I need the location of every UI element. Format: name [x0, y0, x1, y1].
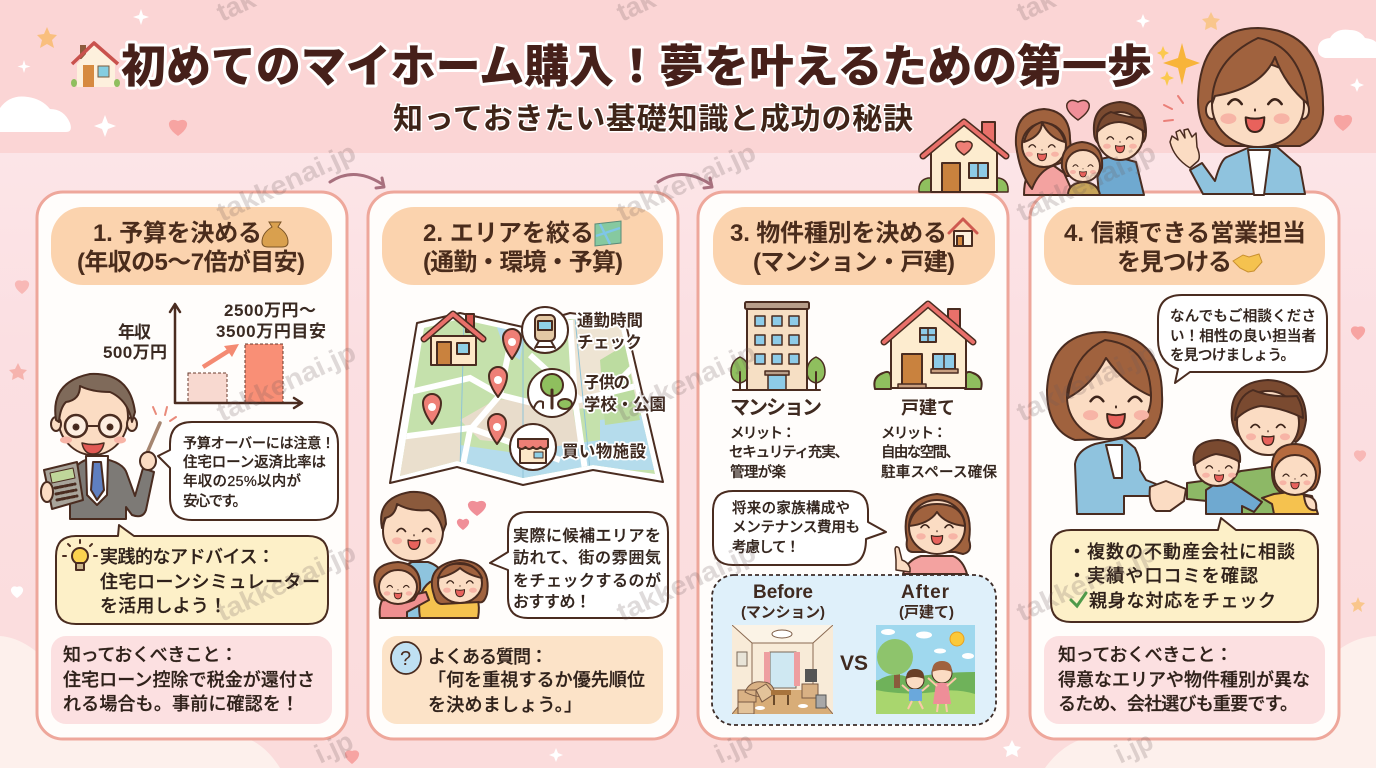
- watermarks: takkenai.jp: [212, 137, 360, 227]
- icon: detached house: [874, 304, 982, 389]
- info box: るため、会社選びも重要です。: [1058, 694, 1298, 714]
- info box: れる場合も。事前に確認を！: [63, 694, 299, 714]
- icon: light bulb: [63, 540, 97, 570]
- watermarks: takkenai.jp: [1012, 337, 1160, 427]
- FAQ box: 「何を重視するか優先順位: [428, 670, 645, 690]
- illustration: header heart house: [919, 122, 1008, 192]
- heading pill: 2. エリアを絞る: [423, 220, 594, 247]
- speech bubble: advisor: 住宅ローン返済比率は: [183, 454, 326, 471]
- character: pointing woman: [895, 494, 970, 574]
- watermarks: takkenai.jp: [1012, 537, 1160, 627]
- watermarks: takkenai.jp: [612, 537, 760, 627]
- panel: step 1 budget: [37, 192, 347, 739]
- watermarks: takkenai.jp: [1012, 137, 1160, 227]
- icon: question mark: ?: [400, 648, 411, 670]
- map labels: [562, 311, 666, 461]
- speech bubble: advisor: 予算オーバーには注意！: [183, 435, 335, 451]
- FAQ box: を決めましょう。」: [428, 695, 582, 715]
- icon: tree and park: [528, 369, 576, 417]
- heading pill: 4. 信頼できる営業担当: [1064, 220, 1306, 247]
- speech bubble: advisor: 年収の25%以内が: [183, 472, 302, 490]
- speech bubble: visit areas: 訪れて、街の雰囲気: [513, 549, 661, 567]
- watermarks: [212, 0, 1160, 768]
- panel: step 2 area: [368, 192, 678, 739]
- character: agent woman: [1047, 332, 1186, 514]
- info box: 知っておくべきこと：: [63, 645, 238, 665]
- checklist box: [1051, 518, 1318, 622]
- illustration: children in garden: [876, 625, 975, 714]
- comparison labels: 自由な空間、: [881, 444, 960, 461]
- icon: small house in title: [71, 43, 120, 87]
- comparison labels: メリット：: [881, 426, 947, 442]
- comparison labels: [729, 397, 998, 481]
- before after comparison: [712, 575, 996, 725]
- watermarks: takkenai.jp: [212, 337, 360, 427]
- map labels: 学校・公園: [584, 394, 666, 414]
- character: waving agent woman: [1164, 28, 1323, 195]
- comparison labels: 戸建て: [901, 398, 955, 418]
- speech bubble: visit areas: をチェックするのが: [513, 571, 661, 590]
- watermarks: takkenai.jp: [212, 537, 360, 627]
- speech bubble: future plans: メンテナンス費用も: [732, 519, 860, 536]
- speech bubble: future plans: [713, 491, 886, 565]
- illustration: header family: [1016, 102, 1146, 195]
- text: VS: VS: [840, 652, 868, 675]
- speech bubble: future plans: 将来の家族構成や: [732, 499, 850, 517]
- heading pill: 3. 物件種別を決める: [730, 220, 947, 247]
- comparison labels: 管理が楽: [730, 463, 786, 481]
- speech bubble: visit areas: 実際に候補エリアを: [513, 527, 661, 545]
- tip box: [56, 525, 328, 624]
- speech bubble: advisor: [158, 422, 338, 520]
- speech bubble: advisor: 安心です。: [183, 493, 247, 510]
- tip box: 実践的なアドバイス：: [100, 547, 275, 567]
- icon: shop: [510, 424, 556, 470]
- checklist box: ・複数の不動産会社に相談: [1068, 542, 1295, 562]
- icon: family heart: [1067, 100, 1089, 120]
- bar chart: 年収: [118, 322, 151, 342]
- checklist box: ・実績や口コミを確認: [1068, 566, 1258, 586]
- character: family: [374, 492, 488, 618]
- info box: 知っておくべきこと：: [1058, 645, 1233, 665]
- heading pill: [1044, 207, 1325, 285]
- panel: step 4 sales agent: [1030, 192, 1339, 739]
- heading pill: [713, 207, 995, 285]
- checklist box: 親身な対応をチェック: [1089, 591, 1276, 611]
- comparison labels: セキュリティ充実、: [729, 444, 849, 461]
- icon: house: [424, 314, 483, 365]
- comparison labels: マンション: [730, 397, 822, 419]
- bar chart: 500万円: [103, 343, 167, 362]
- map labels: 買い物施設: [562, 442, 646, 461]
- FAQ box: [382, 636, 663, 724]
- heading pill: (年収の5〜7倍が目安): [77, 248, 305, 276]
- heading pill: (マンション・戸建): [753, 249, 955, 276]
- map labels: 通勤時間: [577, 311, 643, 330]
- panel: step 3 property type: [698, 192, 1008, 739]
- comparison labels: 駐車スペース確保: [881, 464, 998, 481]
- before after comparison: (戸建て): [899, 604, 954, 621]
- FAQ box: よくある質問：: [428, 647, 548, 667]
- map labels: チェック: [577, 333, 642, 352]
- bar chart: 3500万円目安: [216, 322, 326, 341]
- bar chart: [103, 301, 326, 408]
- watermarks: takkenai.jp: [612, 337, 760, 427]
- info box: 得意なエリアや物件種別が異な: [1058, 669, 1310, 690]
- icon: sparkle: [1157, 43, 1200, 86]
- speech bubble: consult: を見つけましょう。: [1170, 347, 1295, 364]
- before after comparison: After: [901, 582, 950, 603]
- speech bubble: consult: なんでもご相談くださ: [1170, 307, 1316, 325]
- icon: apartment building: [731, 302, 825, 390]
- map with pins: [390, 307, 670, 490]
- title: 初めてのマイホーム購入！夢を叶えるための第一歩: [121, 41, 1152, 92]
- speech bubble: visit areas: おすすめ！: [513, 593, 591, 611]
- icon: question mark: [391, 642, 421, 674]
- tip box: 住宅ローンシミュレーター: [100, 572, 320, 592]
- arrow: step 2 to 3: [658, 174, 712, 188]
- character: advisor man: [41, 374, 176, 519]
- speech bubble: consult: い！相性の良い担当者: [1170, 328, 1316, 345]
- arrow: step 1 to 2: [330, 174, 384, 188]
- heading pill: (通勤・環境・予算): [423, 249, 623, 276]
- comparison labels: メリット：: [730, 426, 796, 442]
- tip box: を活用しよう！: [100, 596, 227, 616]
- illustration: cluttered room: [732, 625, 833, 714]
- icon: train: [522, 307, 568, 353]
- map labels: 子供の: [584, 373, 630, 392]
- heading pill: 1. 予算を決める: [93, 220, 262, 247]
- heading pill: [382, 207, 663, 285]
- watermarks: takkenai.jp: [612, 137, 760, 227]
- heading pill: を見つける: [1117, 249, 1232, 276]
- speech bubble: consult: [1158, 295, 1327, 383]
- speech bubble: visit areas: [490, 512, 668, 618]
- info box: [51, 636, 332, 724]
- before after comparison: Before: [753, 582, 813, 603]
- before after comparison: (マンション): [741, 604, 825, 621]
- info box: 住宅ローン控除で税金が還付さ: [63, 669, 315, 690]
- subtitle: 知っておきたい基礎知識と成功の秘訣: [393, 103, 913, 136]
- icon: hearts: [457, 501, 486, 530]
- heading pill: [51, 207, 332, 285]
- info box: [1044, 636, 1325, 724]
- bar chart: 2500万円〜: [224, 301, 316, 320]
- speech bubble: future plans: 考慮して！: [732, 539, 800, 556]
- icon: map pins: [423, 329, 521, 444]
- character: family with children: [1187, 380, 1320, 514]
